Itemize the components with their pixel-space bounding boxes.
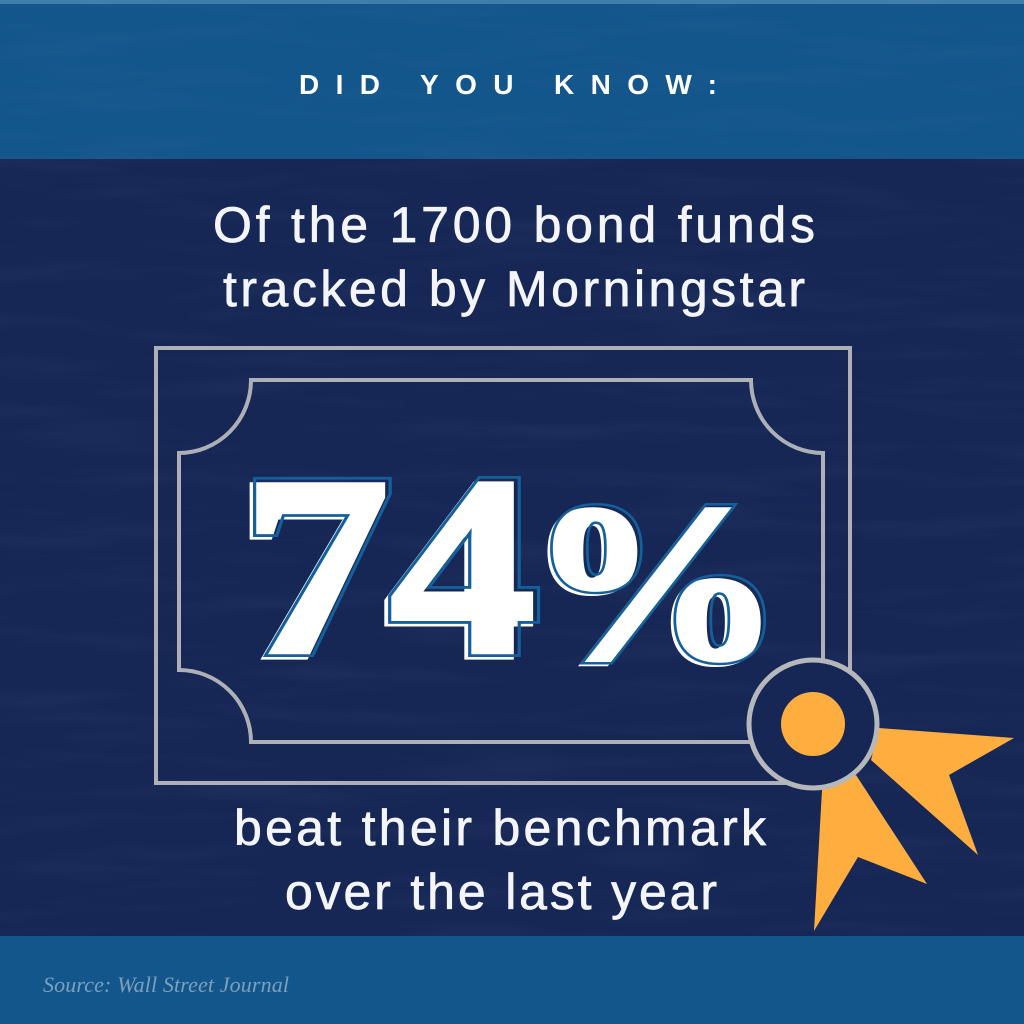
intro text [213, 197, 815, 317]
blue offset outline of 74%: 4 [391, 422, 539, 707]
white fill of 74%: % [526, 461, 780, 709]
source: Source: Wall Street Journal [43, 972, 289, 997]
blue offset outline of 74%: % [530, 458, 784, 706]
blue offset outline of 74% [253, 476, 766, 666]
badge ring [749, 660, 877, 788]
header band [0, 0, 1024, 159]
white fill of 74%: 7 [238, 427, 387, 711]
white fill of 74%: 4 [386, 426, 533, 711]
blue offset outline of 74%: 7 [243, 423, 392, 707]
ribbon tails [871, 728, 1014, 855]
certificate frame [156, 348, 850, 783]
white fill of 74% [238, 426, 780, 711]
ribbon badge [749, 660, 1014, 931]
heading: did you know: DID YOU KNOW: [299, 69, 717, 100]
footer band [0, 936, 1024, 1024]
intro text: tracked by Morningstar [223, 261, 805, 317]
big number: 74% [250, 476, 766, 667]
badge center [781, 692, 845, 756]
closing text: over the last year [285, 864, 717, 920]
closing text [234, 800, 767, 920]
closing text: beat their benchmark [234, 800, 767, 856]
intro text: Of the 1700 bond funds [213, 197, 815, 253]
